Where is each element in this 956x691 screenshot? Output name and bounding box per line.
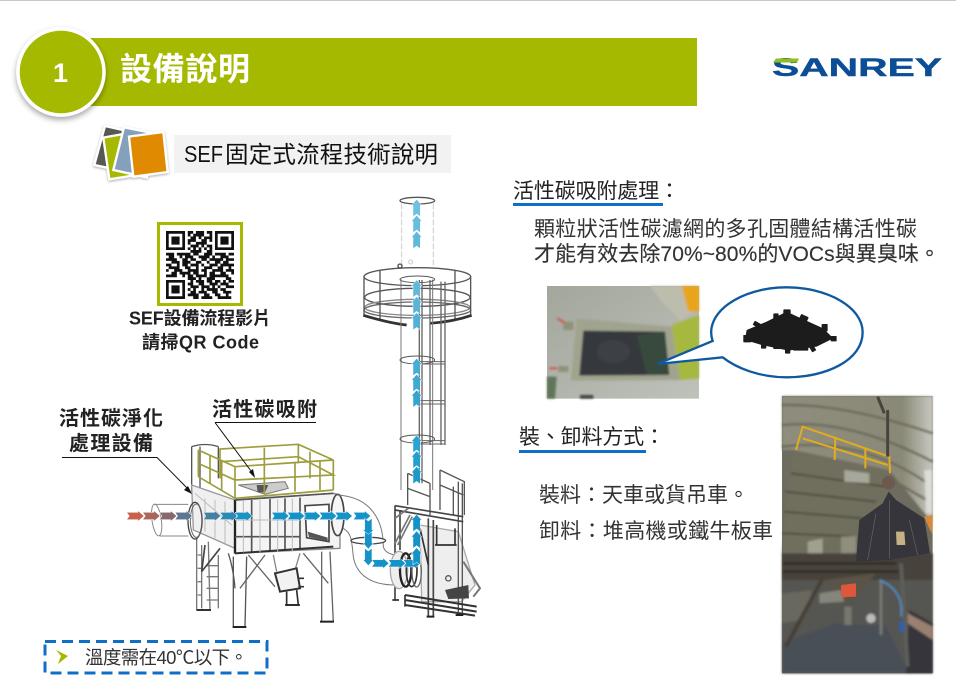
label: activated carbon purification equipment <box>59 407 192 494</box>
subtitle: SEF process description <box>174 135 451 173</box>
text: adsorption description <box>534 218 940 266</box>
photo: carbon bag lifted over hopper <box>782 396 933 673</box>
icon: carbon pellet pile <box>743 309 837 354</box>
text: unloading method: 卸料：堆高機或鐵牛板車 <box>539 520 773 543</box>
subtitle: SEF process description: SEF <box>184 141 223 167</box>
activated carbon unit: body <box>185 444 344 553</box>
logo: SANREY <box>772 54 943 82</box>
heading: equipment description: 設備說明 <box>120 51 250 87</box>
photo: hopper <box>547 286 699 399</box>
QR caption: 請掃QR Code <box>142 332 259 352</box>
airflow arrows <box>127 511 422 569</box>
inlet duct and connecting duct <box>150 495 395 585</box>
photo: carbon hopper with callout <box>547 286 863 399</box>
text: adsorption description: 顆粒狀活性碳濾網的多孔固體結構活性碳 <box>534 218 917 241</box>
activated carbon unit: lower supports <box>197 538 334 627</box>
safety railing <box>198 444 333 498</box>
QR caption: SEF設備流程影片 <box>129 308 271 328</box>
note: temperature requirement: 溫度需在40℃以下。 <box>85 647 248 668</box>
logo: SANREY: SANREY <box>772 54 943 82</box>
label: activated carbon purification equipment: 處理設備 <box>69 432 153 455</box>
icon: stacked cards <box>94 126 168 179</box>
QR code <box>166 232 234 298</box>
QR caption <box>129 308 271 352</box>
callout: activated carbon pellets <box>657 287 863 377</box>
subtitle: SEF process description: 固定式流程技術說明 <box>225 142 438 168</box>
text: adsorption description: 才能有效去除70%~80%的VOCs與異臭味。 <box>534 243 940 266</box>
label: activated carbon adsorption: 活性碳吸附 <box>212 398 317 421</box>
chimney stack and platform <box>363 197 472 490</box>
process equipment diagram <box>127 197 480 627</box>
QR code frame <box>158 224 242 304</box>
label: activated carbon purification equipment: 活性碳淨化 <box>59 407 163 430</box>
text: loading method: 裝料：天車或貨吊車。 <box>539 484 749 507</box>
header banner <box>18 29 697 115</box>
note: temperature requirement <box>45 642 267 673</box>
heading: activated carbon adsorption treatment: 活性碳吸附處理： <box>513 180 680 203</box>
heading: loading and unloading methods: 裝、卸料方式： <box>519 426 665 449</box>
section number badge: 1 <box>53 58 68 88</box>
label: activated carbon adsorption <box>212 398 317 478</box>
section number badge <box>18 29 104 115</box>
fan and frame <box>390 470 480 617</box>
